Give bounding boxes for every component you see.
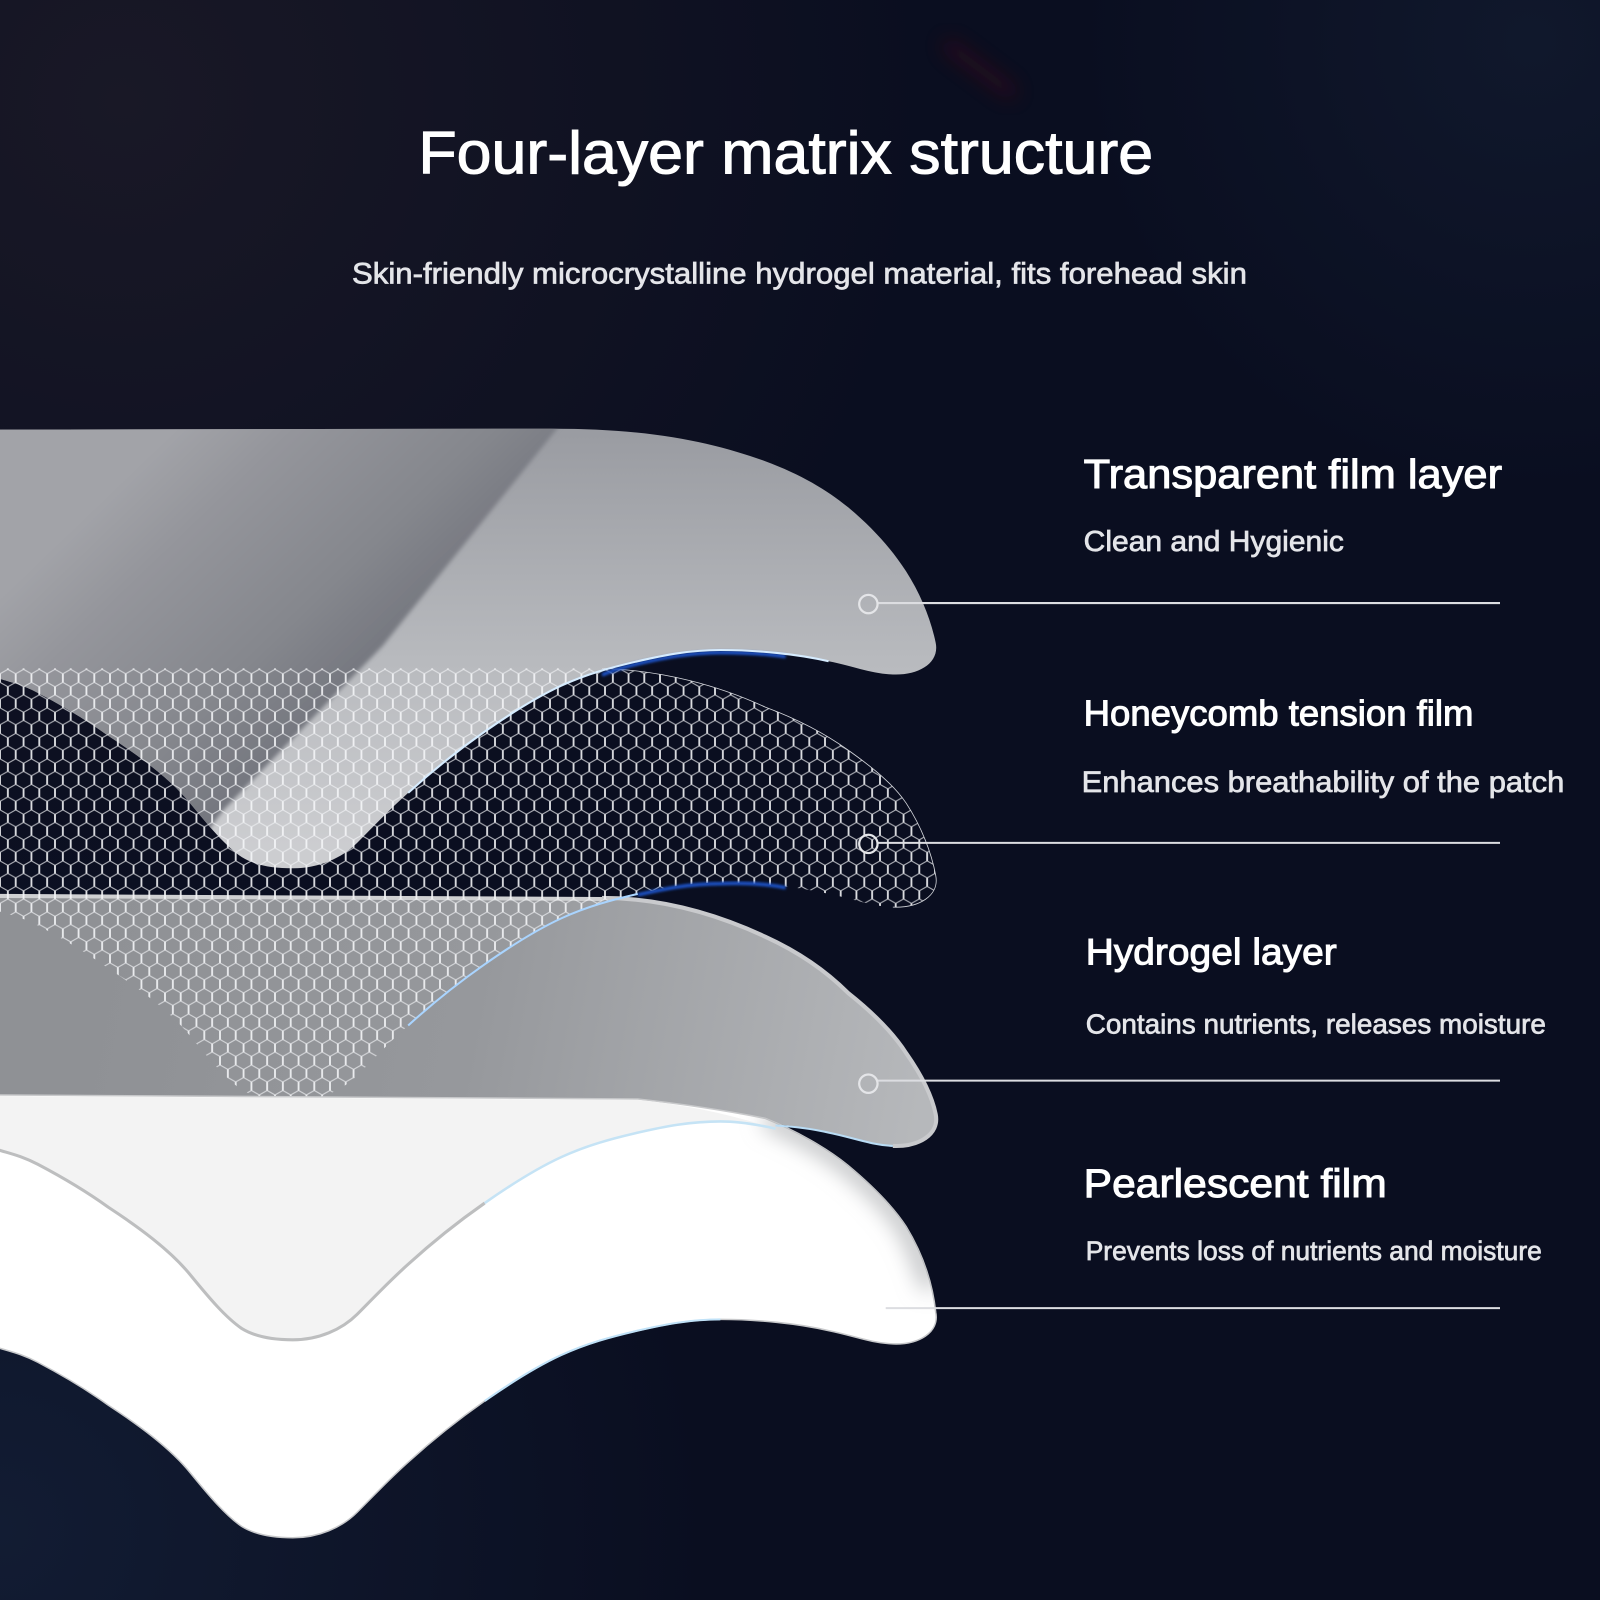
label: pearlescent film — [1084, 1162, 1542, 1266]
label: hydrogel layer: Contains nutrients, releases moisture — [1086, 1009, 1546, 1040]
layer 3: hydrogel — [0, 888, 959, 1163]
label: honeycomb tension film — [1082, 694, 1564, 799]
callout: hydrogel layer — [859, 1074, 1500, 1093]
layer 4: pearlescent film — [0, 1095, 936, 1538]
label: transparent film layer: Clean and Hygienic — [1084, 526, 1344, 558]
callout: pearlescent film — [886, 1307, 1500, 1309]
subtitle: Skin-friendly microcrystalline hydrogel material, fits forehead skin — [352, 258, 1247, 291]
label: honeycomb tension film: Enhances breathability of the patch — [1082, 766, 1564, 799]
hydrogel overlap on pearlescent film — [0, 1096, 893, 1401]
label: pearlescent film: Prevents loss of nutrients and moisture — [1086, 1236, 1542, 1266]
layer 2: honeycomb tension film — [0, 668, 936, 1101]
label: hydrogel layer: Hydrogel layer — [1086, 931, 1337, 972]
label: honeycomb tension film: Honeycomb tension film — [1084, 694, 1473, 734]
label: pearlescent film: Pearlescent film — [1084, 1162, 1387, 1206]
title: Four-layer matrix structure — [418, 119, 1153, 186]
callout: transparent film layer — [859, 595, 1500, 613]
layer 1: transparent film — [0, 413, 959, 888]
callout: honeycomb tension film — [859, 835, 1500, 853]
label: transparent film layer: Transparent film layer — [1084, 451, 1502, 497]
label: hydrogel layer — [1086, 931, 1546, 1040]
label: transparent film layer — [1084, 451, 1502, 558]
edge highlights — [408, 650, 829, 1026]
